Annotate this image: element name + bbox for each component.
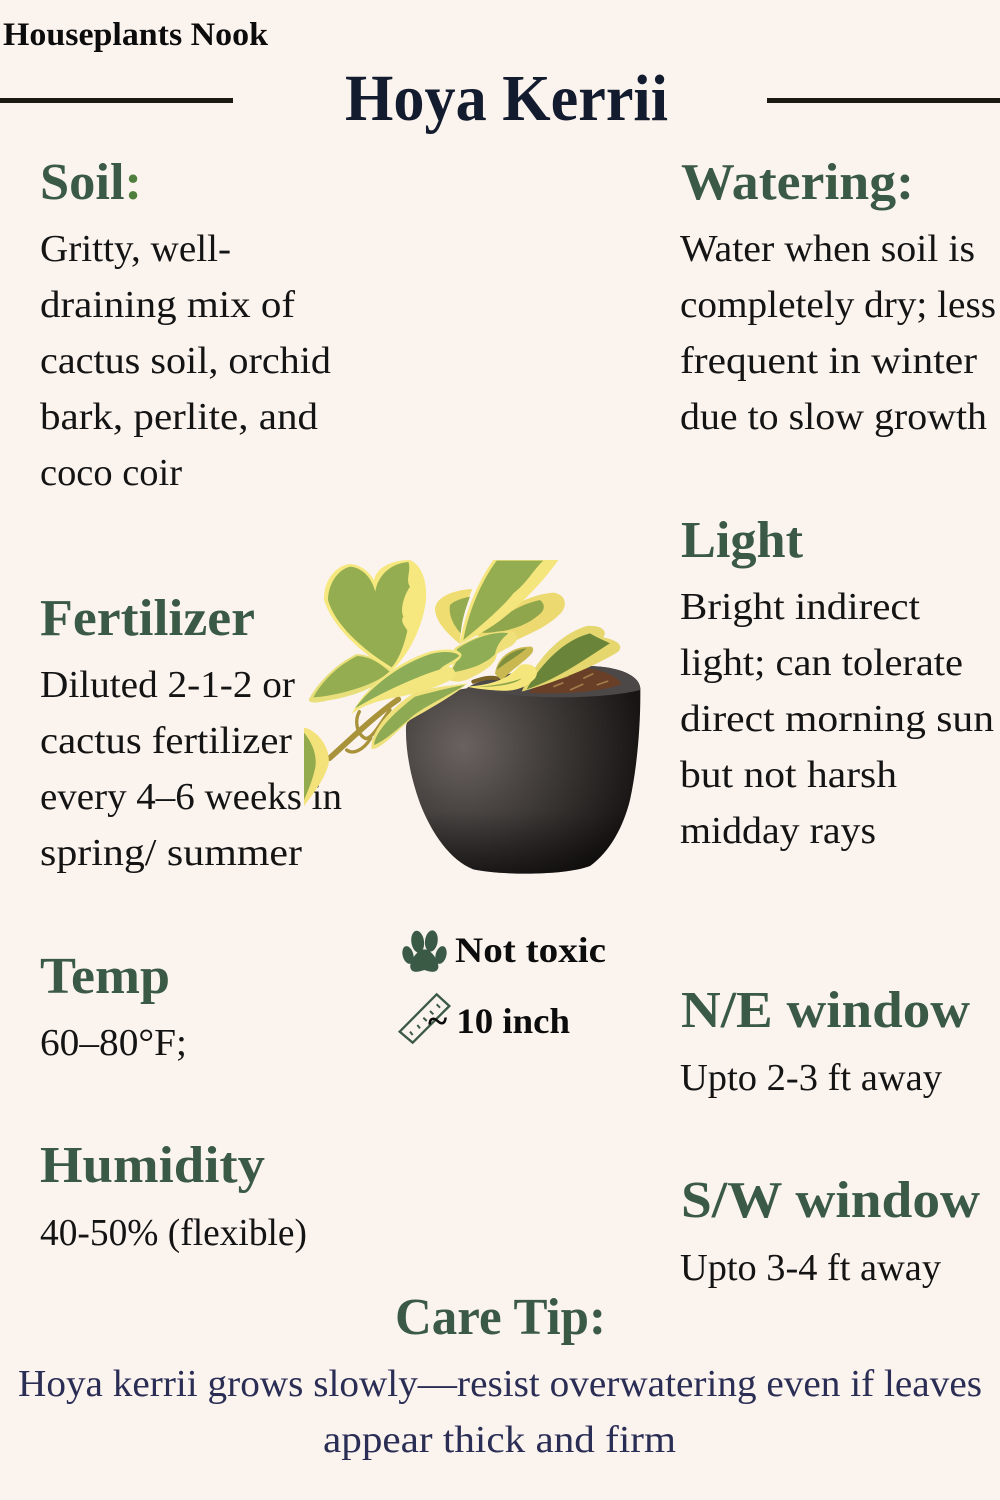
panel: humidity <box>40 1137 307 1254</box>
leaf: front small <box>467 664 537 691</box>
leaf: top centre <box>460 560 558 644</box>
text: soil description: bark, perlite, and <box>40 396 318 438</box>
text: s/w distance: Upto 3-4 ft away <box>680 1247 941 1289</box>
text: watering description <box>680 228 996 438</box>
panel: temperature <box>40 948 187 1064</box>
text: light description <box>680 586 994 852</box>
text: fertilizer description: spring/ summer <box>40 832 302 874</box>
heading: temp: Temp <box>40 948 170 1005</box>
heading: care tip: Care Tip: <box>395 1289 606 1346</box>
text: light description: but not harsh <box>680 754 897 796</box>
panel: south west window <box>680 1172 980 1289</box>
text: care tip message: Hoya kerrii grows slowly—resist overwatering even if leaves <box>18 1363 982 1405</box>
pot <box>406 666 640 874</box>
leaf: centre upper <box>447 631 517 681</box>
text: soil description: draining mix of <box>40 284 295 326</box>
panel: pet safety and size <box>400 930 606 1043</box>
title: Hoya Kerrii <box>345 62 668 135</box>
leaf: back centre <box>495 647 533 681</box>
text: soil description: Gritty, well- <box>40 228 231 270</box>
leaf: lower front <box>371 683 467 749</box>
text: light description: midday rays <box>680 810 876 852</box>
panel: care tip <box>18 1289 982 1461</box>
panel: light <box>680 512 994 852</box>
heading: soil: Soil: <box>40 154 142 211</box>
text: n/e distance: Upto 2-3 ft away <box>680 1057 942 1099</box>
text: humidity range: 40-50% (flexible) <box>40 1212 307 1254</box>
text: watering description: frequent in winter <box>680 340 977 382</box>
text: fertilizer description: cactus fertilizer <box>40 720 292 762</box>
panel: fertilizer <box>40 590 342 874</box>
label: 10 inch: ~ 10 inch <box>428 1001 570 1041</box>
text: light description: light; can tolerate <box>680 642 963 684</box>
heading: n/e window: N/E window <box>681 982 970 1039</box>
text: soil description: coco coir <box>40 452 182 494</box>
panel: watering <box>680 154 996 438</box>
leaf: behind left <box>435 589 472 644</box>
icon: paw print <box>401 930 448 972</box>
text: soil description: cactus soil, orchid <box>40 340 331 382</box>
text: watering description: Water when soil is <box>680 228 975 270</box>
text: fertilizer description <box>40 664 342 874</box>
text: care tip message: appear thick and firm <box>323 1419 676 1461</box>
text: watering description: due to slow growth <box>680 396 987 438</box>
leaf: heart top left <box>324 560 426 671</box>
heading: light: Light <box>681 512 804 569</box>
heading: fertilizer: Fertilizer <box>40 590 255 647</box>
heading: watering: Watering: <box>681 154 914 211</box>
panel: north east window <box>680 982 970 1099</box>
leaf: centre front <box>352 649 462 714</box>
text: fertilizer description: every 4–6 weeks in <box>40 776 342 818</box>
stem <box>329 678 497 758</box>
text: fertilizer description: Diluted 2-1-2 or <box>40 664 295 706</box>
text: light description: direct morning sun <box>680 698 994 740</box>
panel: soil <box>40 154 331 494</box>
leaf: lower left <box>309 654 392 703</box>
label: not toxic: Not toxic <box>455 930 606 970</box>
brand name: Houseplants Nook <box>3 17 269 53</box>
illustration: potted hoya kerrii <box>304 560 640 874</box>
text: care tip message <box>18 1363 982 1461</box>
text: temp range: 60–80°F; <box>40 1022 187 1064</box>
icon: ruler <box>400 994 449 1043</box>
text: soil description <box>40 228 331 494</box>
leaf: right small <box>522 626 620 692</box>
heading: s/w window: S/W window <box>681 1172 980 1229</box>
soil <box>528 668 622 693</box>
text: watering description: completely dry; less <box>680 284 996 326</box>
heading: humidity: Humidity <box>40 1137 265 1194</box>
text: light description: Bright indirect <box>680 586 920 628</box>
leaf: top right <box>477 593 565 643</box>
leaf: cut-off left <box>304 728 329 806</box>
